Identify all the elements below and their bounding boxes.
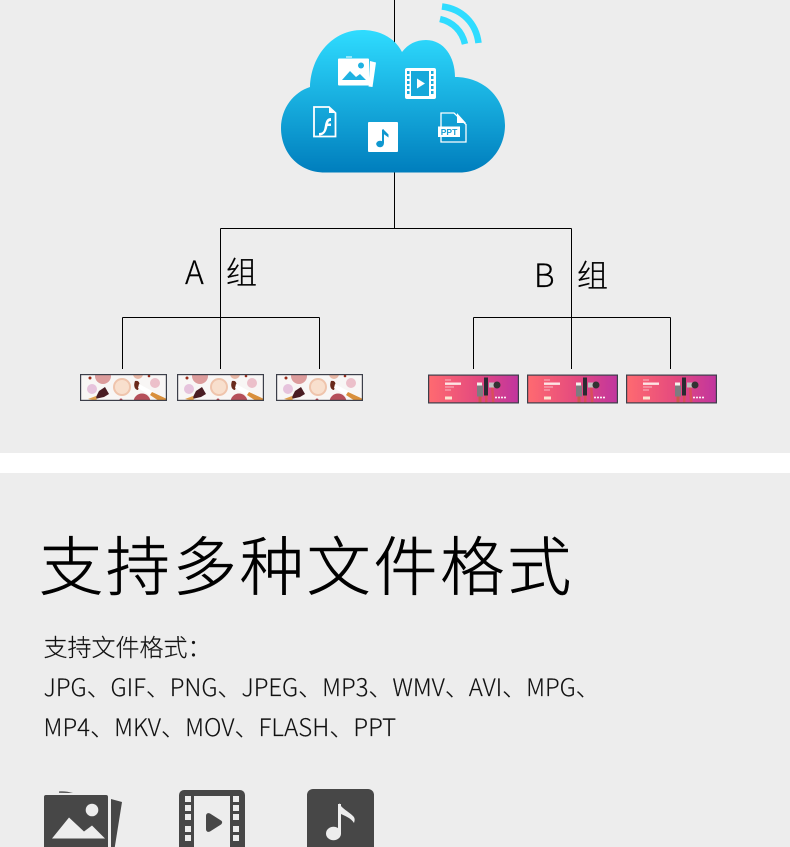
body text	[44, 628, 600, 743]
group A screens	[80, 368, 363, 410]
group label B: B	[534, 251, 555, 297]
icon: ppt file: PPT	[441, 127, 458, 137]
group label B character: 组	[577, 251, 608, 296]
icon: wifi signal	[440, 6, 478, 44]
body text: MP4、MKV、MOV、FLASH、PPT	[44, 708, 396, 743]
icon: film	[405, 68, 436, 99]
top section background	[0, 0, 790, 453]
group label A character: 组	[226, 248, 257, 293]
icon: flash file	[314, 107, 336, 136]
icon: ppt file	[438, 113, 466, 142]
icon: picture	[338, 56, 376, 87]
icon: picture dark	[44, 791, 122, 847]
network connector lines	[122, 0, 670, 369]
white divider band	[0, 453, 790, 473]
group label A: A	[185, 248, 204, 294]
body text: JPG、GIF、PNG、JPEG、MP3、WMV、AVI、MPG、	[44, 668, 600, 703]
cloud with media icons	[281, 6, 505, 172]
icon: music dark	[307, 789, 374, 847]
section title: 支持多种文件格式	[39, 517, 574, 609]
icon: film dark	[179, 790, 245, 847]
group B screens	[428, 374, 717, 404]
body text: 支持文件格式：	[44, 628, 212, 663]
cloud shape	[281, 30, 505, 172]
bottom section background	[0, 473, 790, 847]
icon: music note	[368, 122, 398, 152]
